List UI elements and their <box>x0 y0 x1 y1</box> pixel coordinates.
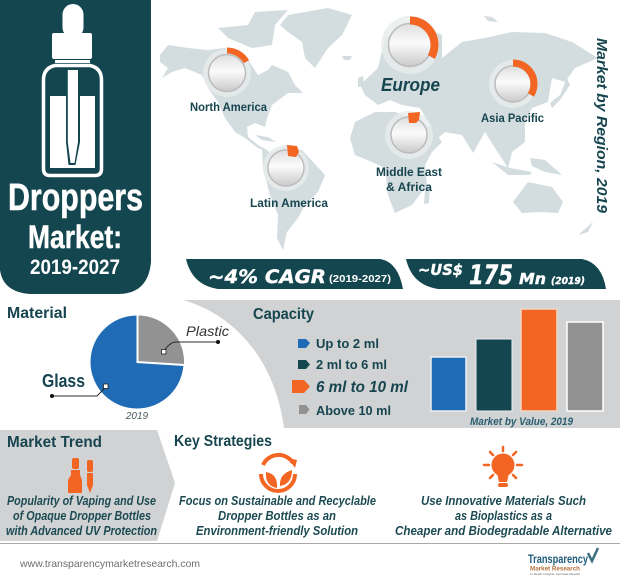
text: strategy one <box>179 494 376 538</box>
logo: In-Depth Insights, Accurate Results <box>530 572 581 576</box>
text: strategy one: Dropper Bottles as an <box>218 509 336 523</box>
callout: plastic <box>162 323 229 354</box>
vertical label: market by region: Market by Region, 2019 <box>593 38 610 214</box>
pill: CAGR <box>186 259 403 289</box>
region labels: Latin America <box>250 196 328 210</box>
icon: dropper bottle <box>44 4 102 176</box>
heading: Droppers: Droppers <box>8 177 143 219</box>
heading: market trend: Market Trend <box>7 434 102 451</box>
icon: bottles <box>68 458 93 493</box>
legend: 6 ml to 10 ml <box>316 379 409 396</box>
pill: market value: Mn <box>519 270 546 288</box>
region labels: North America <box>190 100 267 114</box>
text: trend description <box>6 494 157 538</box>
heading: years: 2019-2027 <box>30 256 120 279</box>
pill: market value <box>406 259 606 291</box>
region labels: Europe <box>381 75 440 95</box>
bar chart <box>431 309 603 411</box>
pill: market value: (2019) <box>551 276 585 287</box>
region labels <box>190 75 544 210</box>
donut: Europe <box>381 16 439 74</box>
logo: Market Research <box>530 566 580 572</box>
pill: market value: ~US$ <box>418 261 463 279</box>
footer url: www.transparencymarketresearch.com <box>19 558 200 570</box>
heading: key strategies: Key Strategies <box>174 433 272 450</box>
panel: market trend <box>0 430 175 541</box>
region labels: Asia Pacific <box>481 111 544 125</box>
donut: Latin America <box>263 145 309 191</box>
caption: market by value: Market by Value, 2019 <box>470 416 574 428</box>
panel: material <box>7 305 229 422</box>
pill: CAGR: (2019-2027) <box>329 274 391 285</box>
donut: Middle East and Africa <box>385 111 433 159</box>
label: pie year: 2019 <box>125 411 149 422</box>
panel: title <box>0 0 151 294</box>
heading: capacity: Capacity <box>253 306 314 323</box>
donut: North America <box>203 49 251 97</box>
callout: plastic: Plastic <box>186 323 229 339</box>
text: strategy one: Focus on Sustainable and Recyclable <box>179 494 376 508</box>
world map <box>160 8 598 250</box>
legend <box>292 336 409 418</box>
legend: 2 ml to 6 ml <box>316 357 387 372</box>
panel: capacity background <box>183 300 620 428</box>
text: strategy two: Use Innovative Materials Such <box>421 494 586 508</box>
region labels: & Africa <box>386 180 432 194</box>
pill: CAGR: ~4% CAGR <box>208 266 326 288</box>
pie chart <box>90 315 184 408</box>
donut: Asia Pacific <box>489 60 537 108</box>
text: strategy two: as Bioplastics as a <box>455 509 552 523</box>
text: strategy two <box>395 494 612 538</box>
text: trend description: Popularity of Vaping and Use <box>7 494 156 508</box>
legend: Above 10 ml <box>316 403 391 418</box>
text: trend description: of Opaque Dropper Bottles <box>13 509 151 523</box>
logo <box>528 548 598 576</box>
text: strategy one: Environment-friendly Solution <box>196 524 358 538</box>
panel: capacity <box>253 306 603 428</box>
icon: recycle leaf <box>261 455 297 491</box>
icon: light bulb <box>484 447 522 487</box>
region labels: Middle East <box>376 165 442 179</box>
text: trend description: with Advanced UV Protection <box>6 524 157 538</box>
pill: market value: 175 <box>469 260 513 291</box>
panel: key strategies <box>174 433 612 538</box>
heading: material: Material <box>7 305 67 322</box>
callout: glass <box>42 371 108 398</box>
logo: Transparency <box>528 554 588 566</box>
heading: Market: Market: <box>28 219 122 255</box>
legend: Up to 2 ml <box>316 336 379 351</box>
callout: glass: Glass <box>42 371 85 391</box>
